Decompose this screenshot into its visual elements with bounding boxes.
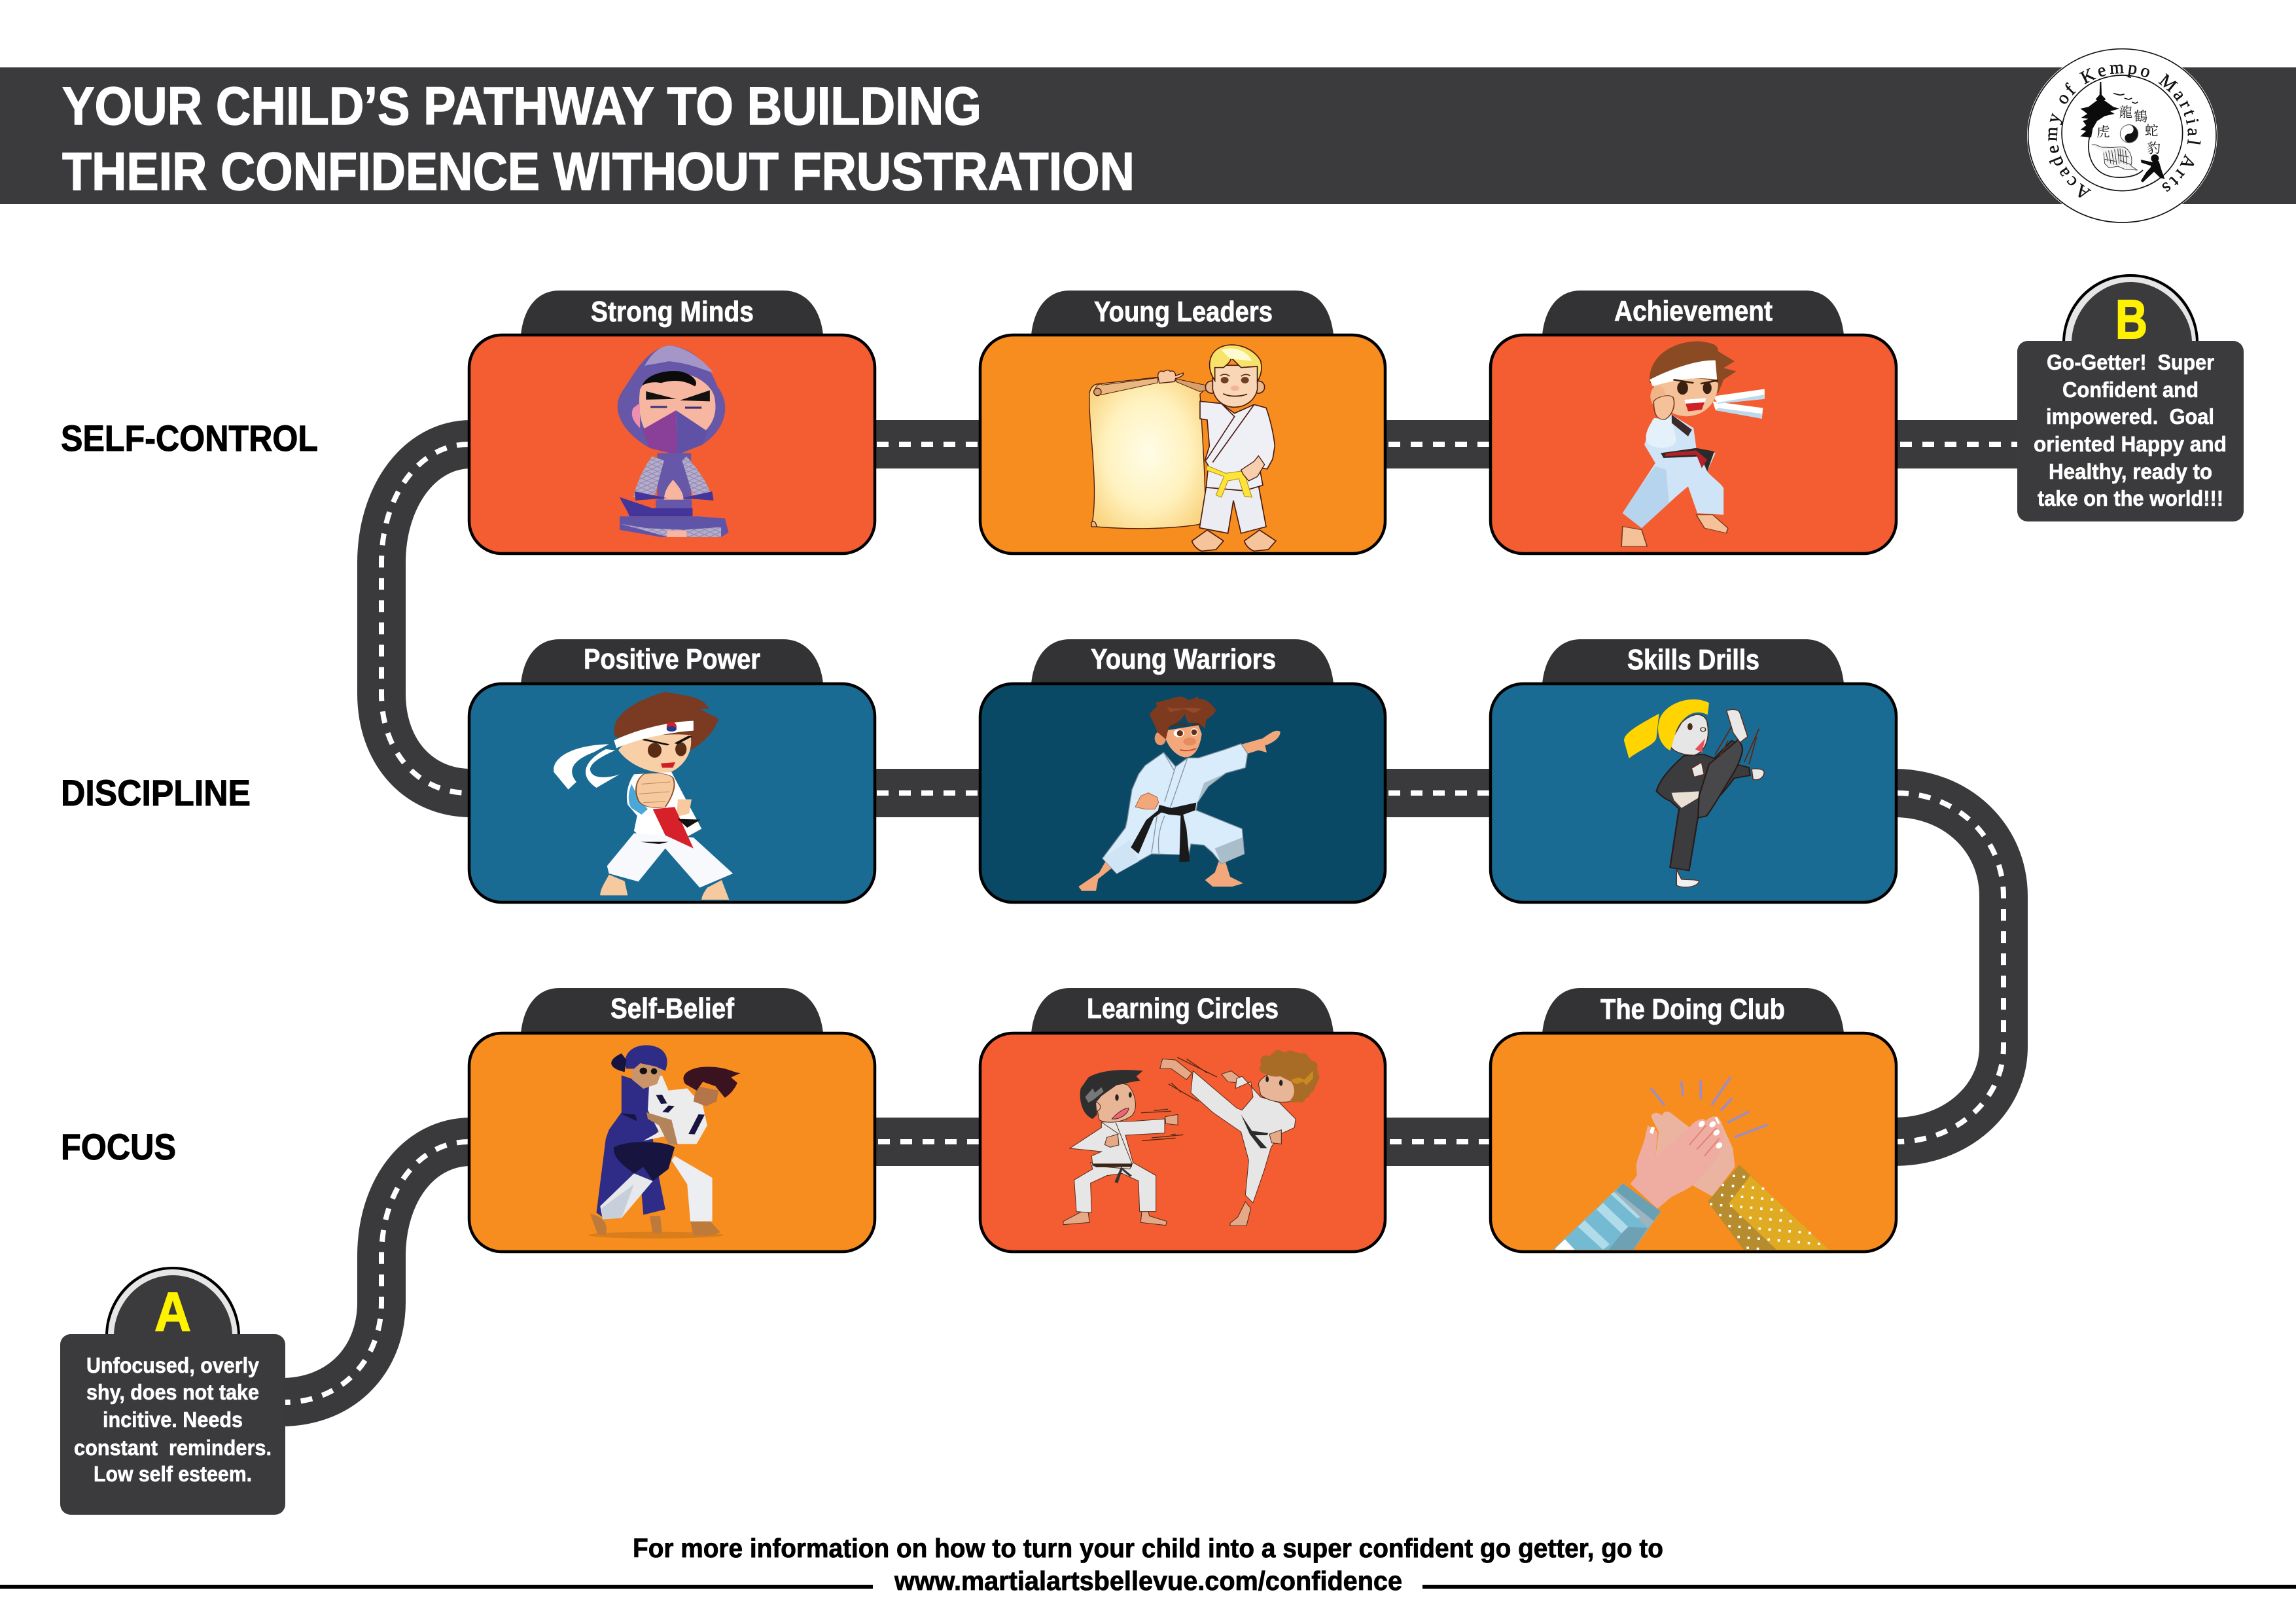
panel: Skills Drills [1491, 639, 1896, 902]
title [62, 77, 1135, 202]
icon: boy in white gi holding scroll [1089, 345, 1276, 551]
footer rule left [0, 1585, 873, 1589]
panel: The Doing Club [1491, 988, 1896, 1254]
icon: boy in karate stance with black belt [1078, 694, 1280, 891]
callout A: starting point [60, 1267, 285, 1515]
logo: Academy of Kempo Martial Arts: 虎 [2096, 120, 2110, 140]
callout B: destination: Healthy, ready to [2049, 459, 2212, 484]
logo: Academy of Kempo Martial Arts: 豹 [2147, 137, 2161, 156]
panel: Positive Power [469, 639, 875, 902]
panel: Young Leaders: Young Leaders [1094, 296, 1273, 328]
road: curve from self-control to discipline [381, 444, 471, 793]
icon: two kids sparring, one punching, one kicking [1063, 1050, 1319, 1226]
panel: The Doing Club: The Doing Club [1600, 993, 1785, 1025]
icon: boy with headband in fighting stance [1621, 342, 1765, 546]
panel: Skills Drills: Skills Drills [1627, 644, 1759, 676]
callout B: destination: impowered. Goal [2046, 404, 2214, 429]
panel: Positive Power: Positive Power [584, 643, 760, 675]
row label: focus: FOCUS [61, 1126, 176, 1167]
panel: Strong Minds: Strong Minds [591, 296, 754, 328]
callout B: destination: B [2115, 289, 2147, 350]
road: curve from discipline to focus [1894, 793, 2004, 1142]
panel: Young Warriors [980, 639, 1385, 902]
callout A: starting point: A [154, 1281, 191, 1343]
icon: two judo fighters grappling [588, 1045, 741, 1239]
logo: Academy of Kempo Martial Arts: Academy of Kempo Martial Arts [2048, 64, 2201, 198]
road: self-control row to callout B [870, 420, 2022, 468]
footer rule right [1422, 1585, 2296, 1589]
footer call to action [633, 1533, 1663, 1596]
callout A: starting point: shy, does not take [86, 1380, 259, 1404]
callout B: destination: take on the world!!! [2038, 486, 2223, 510]
panel: Young Warriors: Young Warriors [1091, 643, 1276, 675]
logo: Academy of Kempo Martial Arts: 蛇 [2145, 120, 2159, 139]
callout A: starting point: incitive. Needs [103, 1407, 243, 1432]
road: curve from callout A to focus [281, 1142, 471, 1402]
panel: Self-Belief [469, 988, 875, 1252]
panel: Achievement [1491, 291, 1896, 554]
callout A: starting point: Unfocused, overly [86, 1353, 260, 1377]
callout A: starting point: Low self esteem. [94, 1462, 252, 1486]
header band [0, 67, 2296, 204]
footer call to action: For more information on how to turn your child into a super confident go getter, go to [633, 1533, 1663, 1563]
callout B: destination: Confident and [2062, 378, 2199, 402]
logo: Academy of Kempo Martial Arts: 龍 [2119, 101, 2132, 120]
callout B: destination [2017, 274, 2244, 521]
icon: blonde girl in black gi kicking [1624, 699, 1764, 887]
panel: Self-Belief: Self-Belief [610, 993, 734, 1025]
road: discipline row [870, 769, 1498, 817]
icon: two hands clapping a high five [1551, 1077, 1829, 1254]
panel: Young Leaders [980, 291, 1385, 554]
road: focus row [870, 1118, 1498, 1166]
icon: meditating ninja [618, 345, 729, 537]
panel: Learning Circles: Learning Circles [1087, 993, 1279, 1025]
row label: self-control: SELF-CONTROL [61, 417, 318, 459]
logo: Academy of Kempo Martial Arts: 鶴 [2134, 105, 2147, 125]
footer call to action: www.martialartsbellevue.com/confidence [894, 1566, 1402, 1596]
panel: Achievement: Achievement [1614, 295, 1773, 327]
panel: Learning Circles [980, 988, 1385, 1252]
callout B: destination: Go-Getter! Super [2047, 350, 2214, 374]
callout A: starting point: constant reminders. [74, 1436, 272, 1460]
title: YOUR CHILD’S PATHWAY TO BUILDING [62, 77, 981, 136]
callout B: destination: oriented Happy and [2034, 432, 2227, 456]
row label: discipline: DISCIPLINE [61, 772, 251, 813]
panel: Strong Minds [469, 291, 875, 554]
title: THEIR CONFIDENCE WITHOUT FRUSTRATION [62, 142, 1135, 202]
icon: boy with Korean headband punching [554, 692, 733, 900]
